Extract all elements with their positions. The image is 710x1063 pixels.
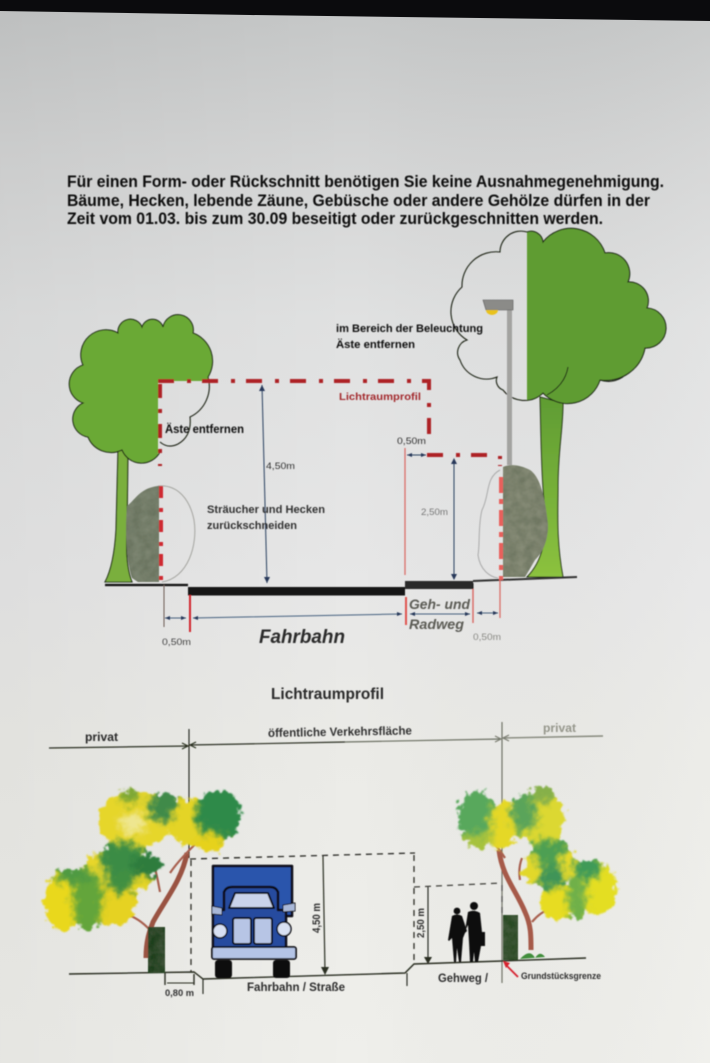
lower diagram: street cross section (45, 721, 616, 999)
label: privat left: privat (85, 730, 118, 744)
icon: right hedge (478, 465, 548, 578)
lower diagram title: Lichtraumprofil (271, 686, 384, 703)
road and sidewalk ground profile (105, 577, 577, 596)
icon: left tree (69, 315, 213, 582)
privat and public area dimension bar (49, 722, 603, 983)
label: Sträucher und Hecken zurückschneiden: zurückschneiden (207, 520, 297, 532)
label: Sträucher und Hecken zurückschneiden (207, 504, 325, 532)
icon: right tree (451, 228, 666, 577)
label: im Bereich der Beleuchtung Äste entfernen (336, 323, 483, 351)
label: im Bereich der Beleuchtung Äste entfernen: Äste entfernen (336, 338, 415, 351)
upper diagram: Lichtraumprofil with green trees (69, 228, 666, 648)
label: 4,50m: 4,50m (266, 461, 295, 472)
dimension: 4,50 m: 4,50 m (311, 903, 323, 933)
label: Fahrbahn / Straße: Fahrbahn / Straße (247, 982, 345, 994)
icon: street lamp (483, 300, 513, 465)
label: 0,80 m (165, 983, 194, 999)
label: Grundstücksgrenze: Grundstücksgrenze (521, 971, 601, 981)
dimension: 2,50 m (416, 887, 432, 964)
label: Gehweg /: Gehweg / (438, 973, 489, 985)
label: öffentliche Verkehrsfläche: öffentliche Verkehrsfläche (268, 723, 412, 740)
heading text block (67, 172, 664, 228)
label: 0,80 m: 0,80 m (165, 988, 194, 999)
label: Geh- und Radweg: Radweg (409, 616, 464, 632)
heading text block: Zeit vom 01.03. bis zum 30.09 beseitigt oder zurückgeschnitten werden. (67, 209, 603, 228)
icon: right watercolor tree (459, 787, 616, 960)
label: Lichtraumprofil red: Lichtraumprofil (339, 391, 421, 403)
dimension: 2,50 m: 2,50 m (416, 908, 427, 938)
icon: left hedge (126, 486, 195, 582)
heading text block: Für einen Form- oder Rückschnitt benötigen Sie keine Ausnahmegenehmigung. (67, 172, 664, 191)
label: Geh- und Radweg (409, 596, 470, 632)
label: privat right: privat (543, 721, 576, 735)
label: 0,50m right: 0,50m (473, 632, 501, 643)
Lichtraumprofil red dash-dot outline (158, 381, 501, 583)
icon: blue truck (212, 866, 296, 978)
label: Sträucher und Hecken zurückschneiden: Sträucher und Hecken (207, 504, 325, 516)
icon: pedestrians silhouette (448, 902, 485, 962)
label: 0,50m left: 0,50m (162, 637, 191, 648)
label: Geh- und Radweg: Geh- und (409, 596, 470, 612)
label: 2,50m: 2,50m (421, 507, 448, 518)
label: im Bereich der Beleuchtung Äste entfernen: im Bereich der Beleuchtung (336, 323, 483, 335)
heading text block: Bäume, Hecken, lebende Zäune, Gebüsche oder andere Gehölze dürfen in der (67, 191, 650, 210)
dimension lines (164, 385, 500, 632)
label: Äste entfernen left: Äste entfernen (165, 423, 244, 436)
icon: left watercolor tree (45, 790, 240, 973)
dimension: 4,50 m (311, 856, 329, 975)
clearance dashed outline (190, 853, 502, 972)
label: 0,50m upper: 0,50m (397, 436, 426, 447)
label: Fahrbahn: Fahrbahn (259, 627, 345, 648)
ground line (69, 958, 586, 994)
arrow: Grundstücksgrenze pointer (503, 961, 518, 977)
